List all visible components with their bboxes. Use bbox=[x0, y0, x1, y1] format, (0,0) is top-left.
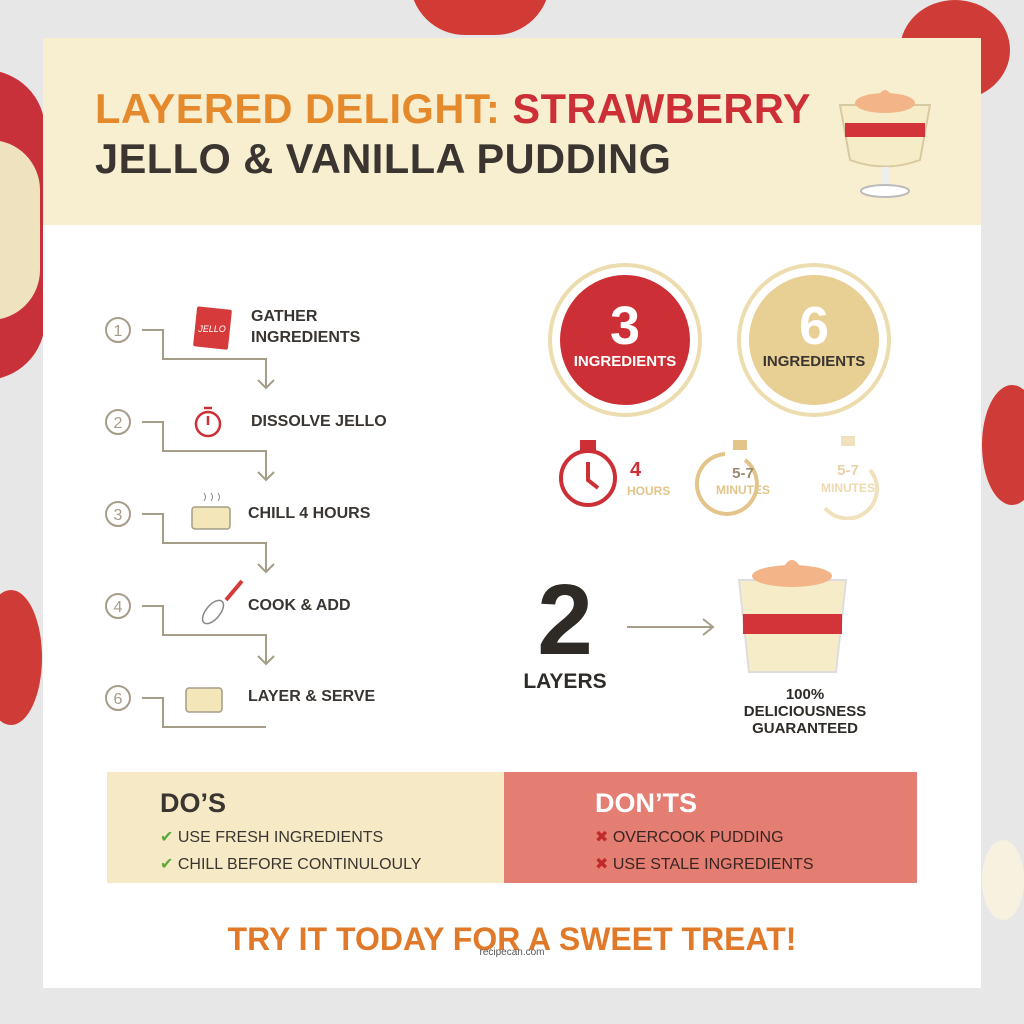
icon: jello box bbox=[193, 306, 232, 350]
timers: MINUTES bbox=[821, 481, 875, 495]
timers: 4 bbox=[630, 459, 642, 481]
100% text bbox=[744, 686, 866, 737]
icon: pot 2 bbox=[186, 688, 222, 712]
text: recipecan.com bbox=[479, 947, 545, 958]
steps flow: 6 bbox=[114, 691, 123, 708]
100% text: 100% bbox=[786, 686, 824, 703]
steps flow: LAYER & SERVE bbox=[248, 688, 375, 705]
steps flow: 1 bbox=[114, 323, 123, 340]
dos panel: ✔ USE FRESH INGREDIENTS bbox=[160, 829, 383, 846]
donts panel: ✖ USE STALE INGREDIENTS bbox=[595, 856, 813, 873]
title bbox=[95, 85, 811, 182]
timers: 5-7 bbox=[837, 462, 859, 479]
text: 6 bbox=[799, 296, 829, 356]
icon: pot bbox=[192, 493, 230, 529]
step labels: GATHER bbox=[251, 308, 317, 325]
arrow bbox=[627, 618, 714, 636]
100% text: DELICIOUSNESS bbox=[744, 703, 866, 720]
background decoration: strawberries bbox=[410, 0, 550, 35]
100% text: GUARANTEED bbox=[752, 720, 858, 737]
2 layers: 2 bbox=[537, 564, 593, 676]
timers: MINUTES bbox=[716, 483, 770, 497]
timers: HOURS bbox=[627, 484, 670, 498]
dos panel: ✔ CHILL BEFORE CONTINULOULY bbox=[160, 856, 421, 873]
steps flow: CHILL 4 HOURS bbox=[248, 505, 370, 522]
steps flow bbox=[105, 306, 387, 728]
step labels: INGREDIENTS bbox=[251, 329, 360, 346]
icon: dessert glass header bbox=[838, 90, 932, 198]
stat circles: 3 bbox=[610, 296, 640, 356]
steps flow: 3 bbox=[114, 507, 123, 524]
title: JELLO & VANILLA PUDDING bbox=[95, 135, 671, 182]
timers bbox=[559, 436, 879, 520]
icon: pudding cup bbox=[738, 560, 847, 673]
icon: jello box: JELLO bbox=[197, 324, 226, 334]
title: LAYERED DELIGHT: STRAWBERRY bbox=[95, 85, 811, 132]
steps flow: COOK & ADD bbox=[248, 597, 351, 614]
icon: timer bbox=[196, 408, 220, 436]
icon: whisk bbox=[199, 581, 242, 627]
donts panel bbox=[504, 772, 917, 883]
donts panel: DON’TS bbox=[595, 788, 697, 818]
2 layers bbox=[523, 564, 607, 693]
dos panel: DO’S bbox=[160, 788, 226, 818]
stat circles: INGREDIENTS bbox=[574, 353, 676, 370]
steps flow: DISSOLVE JELLO bbox=[251, 413, 387, 430]
steps flow: 2 bbox=[114, 415, 123, 432]
2 layers: LAYERS bbox=[523, 670, 607, 693]
header band bbox=[43, 38, 981, 225]
dos panel bbox=[107, 772, 504, 883]
donts panel: ✖ OVERCOOK PUDDING bbox=[595, 829, 784, 846]
footer cta: TRY IT TODAY FOR A SWEET TREAT! bbox=[228, 921, 796, 957]
text: INGREDIENTS bbox=[763, 353, 865, 370]
stat circles bbox=[548, 263, 702, 417]
background decoration: pudding bowl left bbox=[0, 70, 45, 380]
step labels bbox=[251, 308, 360, 346]
timers: 5-7 bbox=[732, 465, 754, 482]
steps flow: 4 bbox=[114, 599, 123, 616]
